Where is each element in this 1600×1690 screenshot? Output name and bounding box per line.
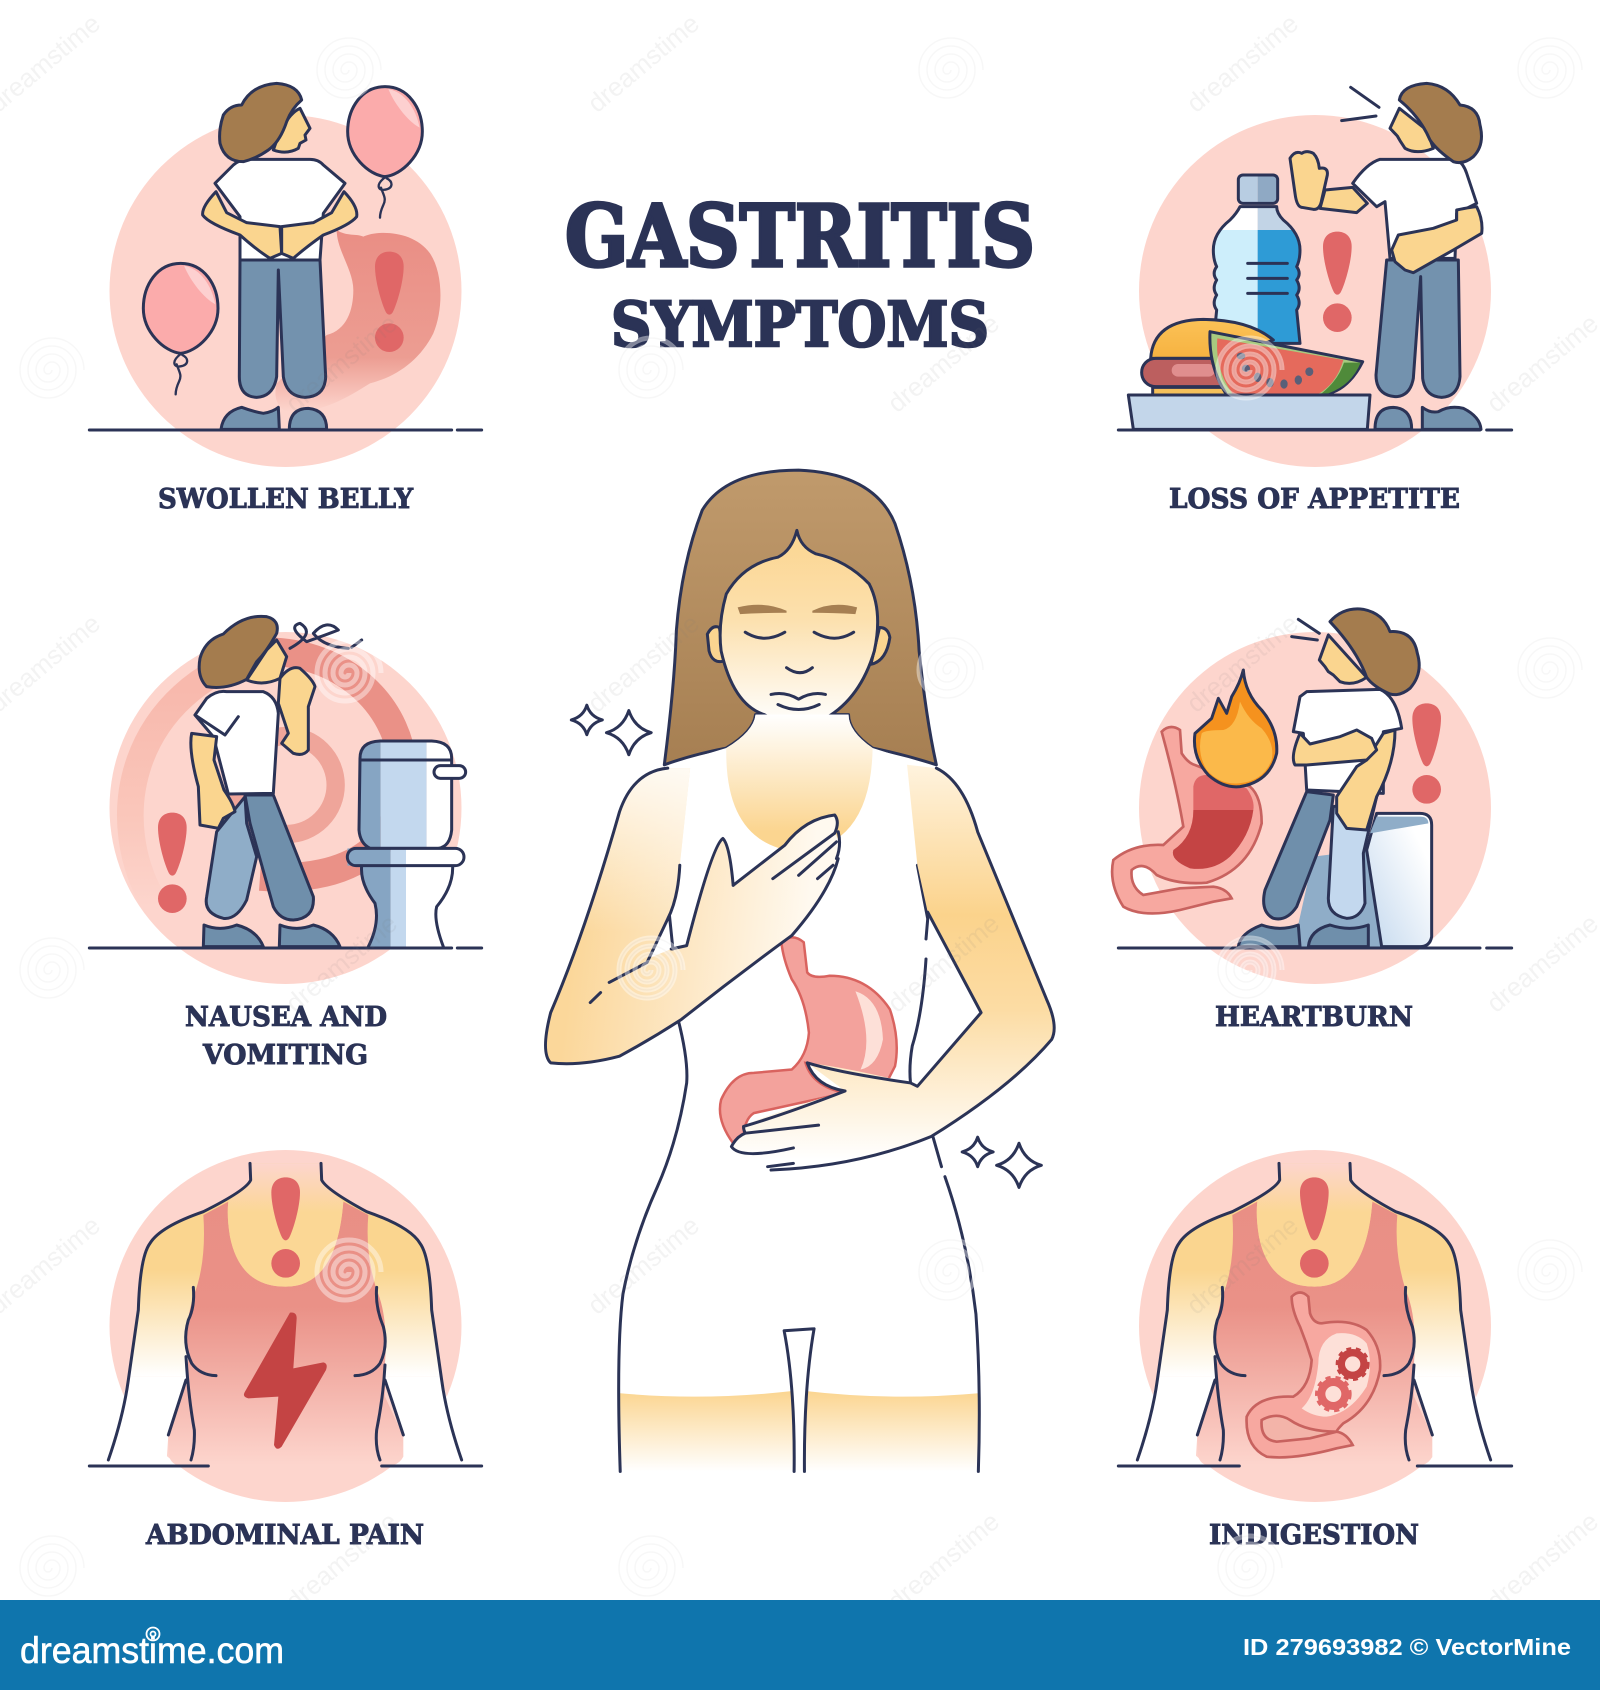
text: dreamstime <box>882 308 1005 418</box>
panel: swollen belly <box>89 83 482 467</box>
panel: loss of appetite <box>1118 83 1512 467</box>
panel: abdominal pain <box>89 1150 482 1502</box>
label: indigestion: INDIGESTION <box>1209 1520 1419 1551</box>
ears <box>707 627 890 664</box>
text: dreamstime <box>582 1210 705 1320</box>
exclamation mark <box>1412 703 1441 804</box>
torso <box>1137 1163 1491 1465</box>
text: dreamstime <box>582 8 705 118</box>
label: swollen belly: SWOLLEN BELLY <box>158 484 414 515</box>
stomach with acid <box>1112 727 1262 913</box>
water bottle <box>1210 175 1304 347</box>
text: dreamstime <box>882 908 1005 1018</box>
stomach <box>720 937 897 1143</box>
label: abdominal pain: ABDOMINAL PAIN <box>145 1520 424 1551</box>
tray <box>1128 395 1370 429</box>
title line: gastritis: GASTRITIS <box>565 187 1035 287</box>
background circle <box>109 1150 461 1502</box>
torso <box>108 1163 462 1465</box>
label: nausea and vomiting: NAUSEA AND <box>185 1002 387 1033</box>
image id and credit: ID 279693982 © VectorMine <box>1243 1634 1571 1660</box>
exclamation mark <box>375 252 404 352</box>
title <box>565 187 1035 361</box>
text: dreamstime <box>582 608 705 718</box>
background circle <box>1139 115 1491 467</box>
dress body <box>619 715 979 1471</box>
hair <box>664 470 936 765</box>
exclamation mark <box>158 813 187 913</box>
background circle <box>109 115 461 467</box>
text: dreamstime <box>1181 8 1304 118</box>
text: dreamstime <box>280 308 403 418</box>
stomach with gears <box>1247 1292 1380 1457</box>
flame <box>1194 670 1277 787</box>
panel: heartburn <box>1112 609 1512 984</box>
text: dreamstime <box>882 1506 1005 1616</box>
body outlines <box>619 865 979 1471</box>
exclamation mark <box>271 1177 300 1278</box>
background circle <box>1139 1150 1491 1502</box>
footer bar <box>0 1600 1600 1690</box>
text: dreamstime <box>1181 608 1304 718</box>
toilet <box>345 738 466 948</box>
neck and chest <box>726 715 873 852</box>
balloon left <box>143 263 218 394</box>
arm on stomach <box>731 765 1054 1170</box>
central woman figure <box>545 470 1054 1471</box>
person feeling sick <box>191 616 362 947</box>
text: dreamstime <box>1181 1210 1304 1320</box>
background circle <box>109 632 461 984</box>
label: nausea and vomiting <box>185 1002 387 1071</box>
sparkles right <box>962 1137 1041 1187</box>
upper legs <box>619 1391 980 1471</box>
panel: nausea and vomiting <box>89 616 482 984</box>
person refusing food <box>1290 83 1482 429</box>
watermelon slice <box>1210 332 1363 395</box>
title line: symptoms: SYMPTOMS <box>611 288 989 361</box>
label: heartburn: HEARTBURN <box>1215 1002 1413 1033</box>
panel: indigestion <box>1118 1150 1512 1502</box>
text: dreamstime <box>280 908 403 1018</box>
lightning bolt <box>244 1313 327 1449</box>
exclamation mark <box>1323 232 1352 332</box>
arm on chest <box>545 768 840 1064</box>
exclamation mark <box>1300 1177 1329 1278</box>
background circle <box>1139 632 1491 984</box>
label: loss of appetite: LOSS OF APPETITE <box>1169 484 1460 515</box>
person holding chest <box>1238 609 1419 947</box>
spiral background <box>130 652 403 907</box>
text: dreamstime <box>280 1506 403 1616</box>
sparkles left <box>571 705 651 755</box>
label: nausea and vomiting: VOMITING <box>202 1040 368 1071</box>
balloon right <box>348 87 422 218</box>
logo text: dreamstime.com <box>20 1630 284 1671</box>
box seat <box>1293 813 1432 947</box>
burger <box>1142 319 1273 396</box>
face <box>720 530 878 726</box>
logo spiral icon <box>146 1628 160 1640</box>
stomach silhouette <box>275 230 440 412</box>
person from behind <box>203 83 357 429</box>
